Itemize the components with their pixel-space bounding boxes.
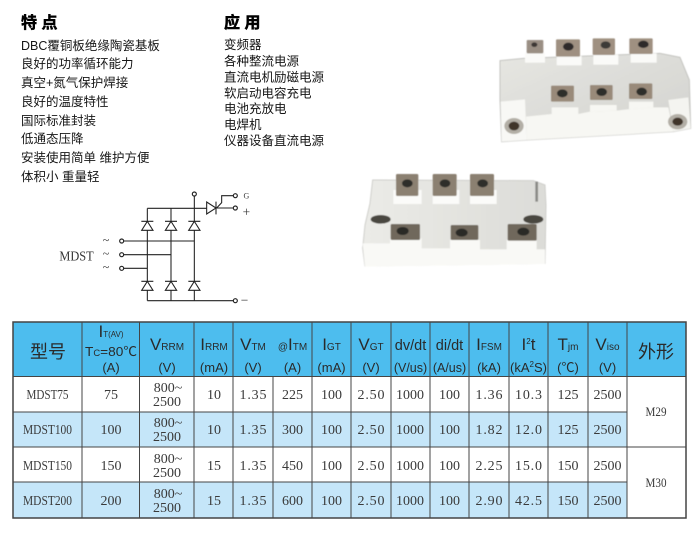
applications list: 电池充放电 bbox=[224, 101, 287, 116]
table header labels: (V) bbox=[599, 360, 616, 375]
table row: MDST75: 1.35 bbox=[240, 388, 266, 403]
table header labels: di/dt bbox=[436, 338, 463, 354]
applications list: 各种整流电源 bbox=[224, 54, 300, 68]
table row: MDST200: 600 bbox=[282, 494, 303, 509]
table header labels: dv/dt bbox=[395, 338, 426, 354]
features list: DBC覆铜板绝缘陶瓷基板 bbox=[21, 38, 160, 53]
table header labels: @ITM bbox=[278, 335, 307, 354]
table row: MDST150: 2500 bbox=[153, 466, 181, 481]
table row: MDST75: 2.50 bbox=[358, 388, 384, 403]
table row: MDST75: 2500 bbox=[594, 388, 622, 403]
table row: MDST75: 10.3 bbox=[515, 388, 542, 403]
table row: MDST100: 2500 bbox=[594, 423, 622, 438]
table row: MDST75: 2500 bbox=[153, 395, 181, 410]
table header labels: 型号 bbox=[30, 342, 66, 362]
applications list: 仪器设备直流电源 bbox=[224, 133, 325, 148]
table header labels: Viso bbox=[595, 335, 620, 354]
features list: 良好的温度特性 bbox=[21, 94, 109, 109]
circuit labels: + bbox=[243, 205, 250, 220]
table row: MDST100: 10 bbox=[207, 423, 221, 438]
table header labels: (kA) bbox=[477, 360, 501, 375]
table header labels: (V) bbox=[158, 360, 176, 375]
table row: MDST150: 150 bbox=[558, 459, 578, 474]
heading: features: 特 点 bbox=[21, 13, 57, 32]
table row: MDST200: 15 bbox=[207, 494, 221, 509]
table row: MDST75: 10 bbox=[207, 388, 221, 403]
table row: MDST100: 100 bbox=[321, 423, 342, 438]
table header labels: VRRM bbox=[150, 335, 184, 354]
wiring bbox=[124, 196, 233, 301]
table row: MDST75: 1.36 bbox=[476, 388, 502, 403]
table row: MDST200 bbox=[23, 487, 622, 516]
table header labels: (V) bbox=[362, 360, 380, 375]
table header labels: (A/us) bbox=[433, 361, 466, 375]
features list: 体积小 重量轻 bbox=[21, 169, 99, 184]
applications list: 变频器 bbox=[224, 37, 262, 52]
table row: MDST75: 1000 bbox=[396, 388, 424, 403]
table row: MDST100: MDST100 bbox=[23, 423, 72, 438]
table header labels: (kA bbox=[510, 360, 530, 375]
table row: MDST75: 800~ bbox=[154, 381, 183, 396]
table: specifications bbox=[13, 322, 686, 518]
table header labels: IT(AV) bbox=[98, 322, 124, 341]
table row: MDST100: 100 bbox=[100, 423, 122, 438]
features list: 低通态压降 bbox=[21, 132, 84, 146]
applications list: 电焊机 bbox=[224, 117, 262, 132]
table row: MDST200: MDST200 bbox=[23, 494, 72, 509]
table row: MDST100: 12.0 bbox=[515, 423, 542, 438]
circuit labels: MDST bbox=[59, 249, 94, 264]
table row: MDST150: 1000 bbox=[396, 459, 424, 474]
table row: MDST75: 225 bbox=[282, 388, 303, 403]
applications list: 软启动电容充电 bbox=[224, 86, 312, 100]
table header labels: (mA) bbox=[317, 360, 346, 375]
heading: applications: 应 用 bbox=[224, 13, 260, 32]
table row: MDST200: 2500 bbox=[594, 494, 622, 509]
table row: MDST100: 800~ bbox=[154, 416, 183, 431]
table row: MDST200: 100 bbox=[321, 494, 342, 509]
table row: MDST100: 2500 bbox=[153, 430, 181, 445]
table header labels: (A) bbox=[284, 360, 301, 375]
features list bbox=[21, 38, 160, 184]
table header labels: (℃) bbox=[557, 360, 579, 375]
table row: MDST100: 2.50 bbox=[358, 423, 384, 438]
table row: MDST200: 200 bbox=[100, 494, 122, 509]
table header labels bbox=[30, 322, 674, 375]
table row: MDST75: 100 bbox=[321, 388, 342, 403]
table row: MDST200: 2.50 bbox=[358, 494, 384, 509]
table row: MDST200: 150 bbox=[558, 494, 578, 509]
table row: MDST75: 100 bbox=[439, 388, 460, 403]
table header labels: IGT bbox=[322, 335, 341, 354]
table row: MDST200: 800~ bbox=[154, 487, 183, 502]
table row: MDST150: 15.0 bbox=[515, 459, 542, 474]
table header labels: IFSM bbox=[476, 335, 502, 354]
table row: MDST150: 2.25 bbox=[476, 459, 502, 474]
table row: MDST100: 300 bbox=[282, 423, 303, 438]
features list: 国际标准封装 bbox=[21, 114, 96, 128]
table row: MDST150 bbox=[23, 452, 622, 481]
icon: module photo centre bbox=[363, 174, 546, 267]
table header background bbox=[13, 322, 686, 376]
table row: MDST75: MDST75 bbox=[26, 388, 68, 403]
circuit labels: − bbox=[241, 292, 248, 307]
table row: MDST75: 125 bbox=[558, 388, 578, 403]
table row: MDST100 bbox=[23, 416, 622, 445]
table header labels: VGT bbox=[358, 335, 384, 354]
table row: MDST200: 42.5 bbox=[515, 494, 542, 509]
circuit diagram bbox=[59, 192, 250, 307]
table header labels: 外形 bbox=[638, 342, 674, 362]
terminals bbox=[120, 192, 237, 303]
table row: MDST200: 2.90 bbox=[476, 494, 502, 509]
diodes bbox=[141, 202, 216, 290]
table row: MDST100: 1.35 bbox=[240, 423, 266, 438]
table row: MDST150: 150 bbox=[100, 459, 122, 474]
table row: MDST150: 100 bbox=[439, 459, 460, 474]
table row: MDST100: 100 bbox=[439, 423, 460, 438]
table row: MDST150: 450 bbox=[282, 459, 303, 474]
table row: MDST100: 125 bbox=[558, 423, 578, 438]
table header labels: S) bbox=[534, 360, 547, 375]
circuit labels: ~ bbox=[103, 233, 110, 247]
icon: module photo top right bbox=[500, 38, 691, 142]
table header labels: 2 bbox=[526, 337, 531, 346]
table row: MDST100: 1000 bbox=[396, 423, 424, 438]
table row: MDST200: 1000 bbox=[396, 494, 424, 509]
applications list: 直流电机励磁电源 bbox=[224, 70, 325, 84]
panel: features bbox=[21, 13, 160, 184]
circuit labels: ~ bbox=[103, 247, 110, 261]
table row: MDST200: 100 bbox=[439, 494, 460, 509]
features list: 真空+氮气保护焊接 bbox=[21, 75, 129, 90]
table row: MDST150: 2500 bbox=[594, 459, 622, 474]
table row backgrounds bbox=[13, 412, 627, 518]
table row: MDST150: 1.35 bbox=[240, 459, 266, 474]
table row: MDST150: 2.50 bbox=[358, 459, 384, 474]
table row: MDST200: 1.35 bbox=[240, 494, 266, 509]
table header labels: t bbox=[531, 335, 536, 354]
table header labels: IRRM bbox=[200, 335, 228, 354]
table header labels: Tjm bbox=[558, 335, 578, 354]
table header labels: (A) bbox=[102, 360, 120, 375]
circuit labels bbox=[59, 192, 250, 307]
table row: MDST75 bbox=[26, 381, 622, 410]
package labels bbox=[646, 404, 666, 490]
features list: 安装使用简单 维护方便 bbox=[21, 150, 150, 165]
table header labels: I bbox=[522, 335, 526, 354]
package labels: M30 bbox=[646, 475, 666, 490]
table row: MDST100: 1.82 bbox=[476, 423, 502, 438]
applications list bbox=[224, 37, 325, 148]
table row: MDST150: 15 bbox=[207, 459, 221, 474]
table header labels: (V/us) bbox=[394, 361, 427, 375]
table header labels: (mA) bbox=[200, 360, 228, 375]
table header labels: 2 bbox=[530, 360, 535, 369]
table row: MDST75: 75 bbox=[104, 388, 118, 403]
table header labels: VTM bbox=[240, 335, 266, 354]
package labels: M29 bbox=[646, 404, 666, 419]
table header labels: TC=80℃ bbox=[85, 344, 137, 359]
table row: MDST150: 800~ bbox=[154, 452, 183, 467]
table row: MDST200: 2500 bbox=[153, 501, 181, 516]
features list: 良好的功率循环能力 bbox=[21, 56, 134, 71]
table header labels: (V) bbox=[244, 360, 262, 375]
table row: MDST150: MDST150 bbox=[23, 459, 72, 474]
table row: MDST150: 100 bbox=[321, 459, 342, 474]
circuit labels: ~ bbox=[103, 260, 110, 274]
panel: applications bbox=[224, 13, 325, 148]
circuit labels: G bbox=[243, 192, 249, 201]
